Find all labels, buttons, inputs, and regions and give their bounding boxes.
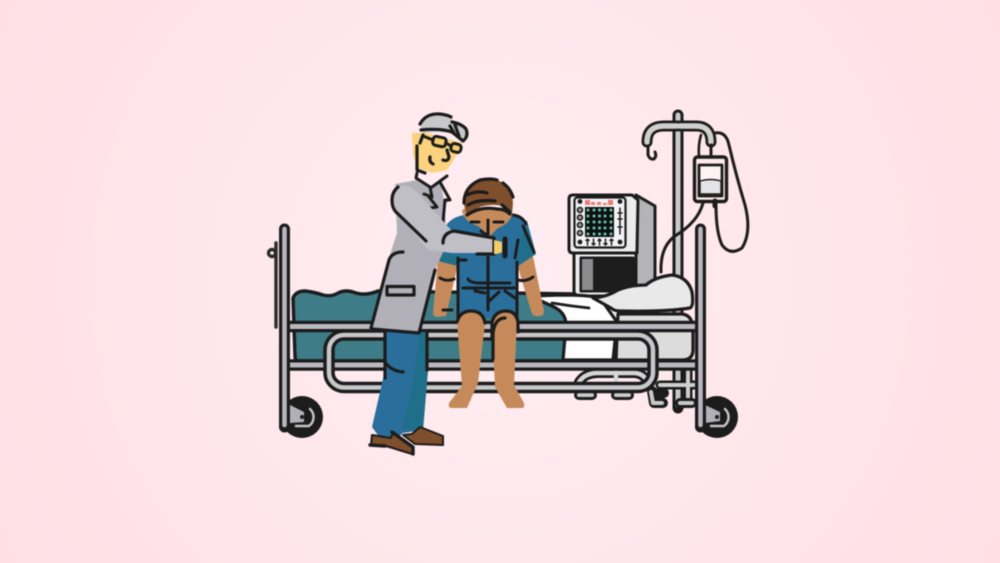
shoes: [370, 427, 443, 454]
shirt and shorts: [438, 215, 536, 318]
hand and stethoscope: [494, 239, 505, 256]
doctor head: [412, 114, 467, 173]
footboard post and right wheel: [696, 229, 738, 438]
arms: [433, 256, 544, 317]
lab coat: [370, 173, 494, 333]
bed undercarriage: [579, 371, 692, 403]
iv bag: [661, 133, 748, 272]
left wheel: [281, 396, 323, 438]
face: [462, 206, 513, 236]
headboard post and handle: [268, 229, 323, 438]
trousers: [372, 332, 428, 438]
patient: [433, 179, 544, 408]
mattress: [293, 275, 693, 361]
hair: [464, 179, 513, 215]
bed rails: [290, 326, 695, 388]
coat sleeve: [393, 185, 494, 253]
control panel: [574, 198, 626, 248]
IV stand: [647, 115, 748, 408]
monitor screen: [580, 257, 634, 292]
monitor machine: [569, 195, 655, 296]
legs: [449, 311, 524, 408]
doctor: [370, 114, 505, 454]
coat pocket: [387, 286, 414, 295]
